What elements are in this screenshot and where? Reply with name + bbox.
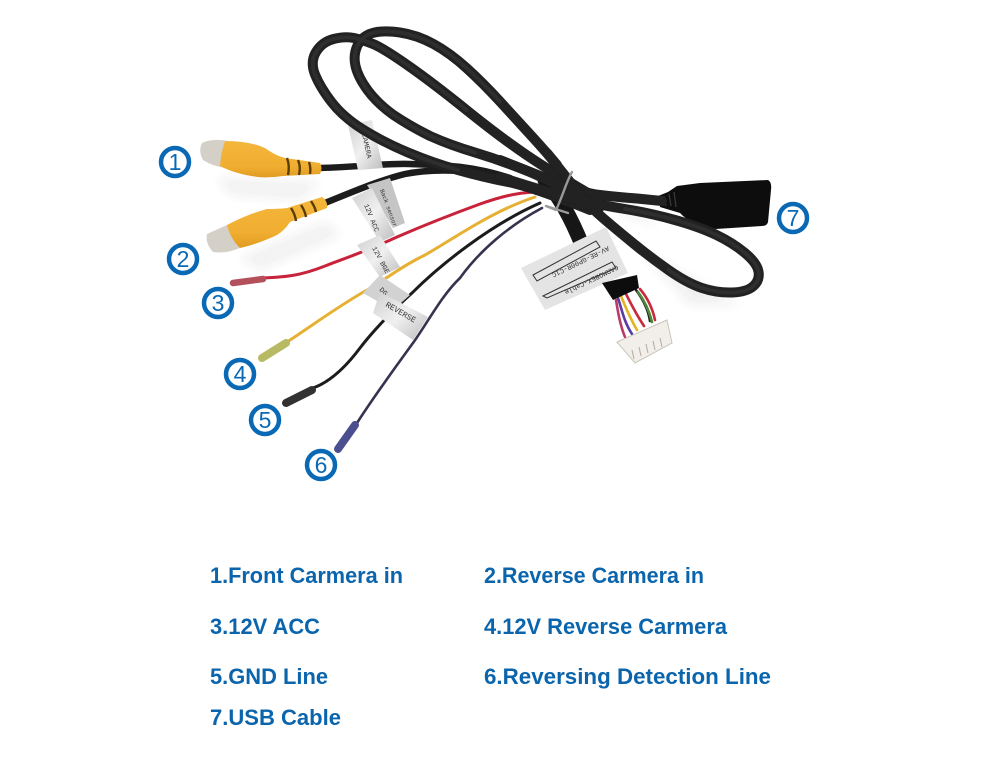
callout badge 2: 2	[177, 246, 189, 272]
label: 12V BGE tag	[357, 235, 400, 277]
label: 12V ACC tag: 12V ACC	[361, 203, 380, 233]
callout badge 5: 5	[259, 407, 271, 433]
part number label	[521, 227, 628, 310]
cable highlights	[313, 31, 759, 293]
USB cable	[500, 160, 662, 201]
callout badge 7	[779, 204, 807, 232]
RCA connector 2	[207, 197, 327, 252]
tail cable to harness connector	[545, 180, 582, 245]
label: 12V ACC tag	[352, 188, 395, 242]
callout badge 1: 1	[169, 149, 181, 175]
label: GND tag: DG	[377, 286, 388, 298]
label: camera tag: CAMERA	[359, 133, 372, 160]
white terminal connector	[617, 320, 672, 363]
RCA cable 1	[320, 164, 510, 178]
wire tip: red	[233, 279, 263, 283]
legend item 2: 2.Reverse Carmera in	[484, 563, 704, 588]
USB connector	[658, 180, 771, 229]
legend item 6: 6.Reversing Detection Line	[484, 664, 771, 689]
label: silver tag	[367, 178, 405, 228]
part number label: CARMOBEX-Cable	[563, 262, 619, 295]
wire tip: purple	[338, 425, 355, 449]
loop left	[313, 37, 600, 210]
legend item 4: 4.12V Reverse Carmera	[484, 614, 728, 639]
legend	[210, 563, 771, 730]
callout badge 5	[251, 406, 279, 434]
legend item 7: 7.USB Cable	[210, 705, 341, 730]
heat shrink	[602, 275, 639, 300]
RCA connector 1	[200, 140, 322, 177]
thin wire: black GND	[313, 203, 540, 388]
wire tip: yellow	[262, 343, 286, 358]
callout badge 7: 7	[787, 205, 799, 231]
label: GND tag	[363, 275, 410, 310]
thin wire: red	[263, 192, 535, 278]
callout badge 2	[169, 245, 197, 273]
callout badge 3	[204, 289, 232, 317]
callout badge 4	[226, 360, 254, 388]
thin wire: yellow	[287, 197, 535, 342]
callout badge 1	[161, 148, 189, 176]
loop right	[355, 31, 600, 207]
thin wire: purple reverse detection	[357, 208, 542, 423]
legend item 5: 5.GND Line	[210, 664, 328, 689]
callout badge 4: 4	[234, 361, 247, 387]
wire tip: black	[286, 390, 312, 403]
big lower loop	[500, 153, 759, 293]
callout badge 6: 6	[315, 452, 327, 478]
RCA cable 2	[325, 170, 510, 203]
label: camera tag	[348, 120, 383, 170]
label: 12V BGE tag: 12V BGE	[369, 246, 390, 275]
callout badge 6	[307, 451, 335, 479]
callout badge 3: 3	[212, 290, 224, 316]
label: REVERSE tag	[373, 292, 428, 340]
legend item 1: 1.Front Carmera in	[210, 563, 403, 588]
label: silver tag: Back sensor	[378, 188, 398, 228]
cable tie	[546, 172, 572, 213]
soft shadows	[218, 178, 740, 305]
cable loops	[313, 31, 759, 293]
ribbon wires	[616, 289, 655, 337]
label: REVERSE tag: REVERSE	[384, 301, 417, 326]
legend item 3: 3.12V ACC	[210, 614, 320, 639]
part number label: AV-RE-GP00R-C1C	[550, 243, 610, 278]
photo: cable harness	[200, 31, 771, 449]
